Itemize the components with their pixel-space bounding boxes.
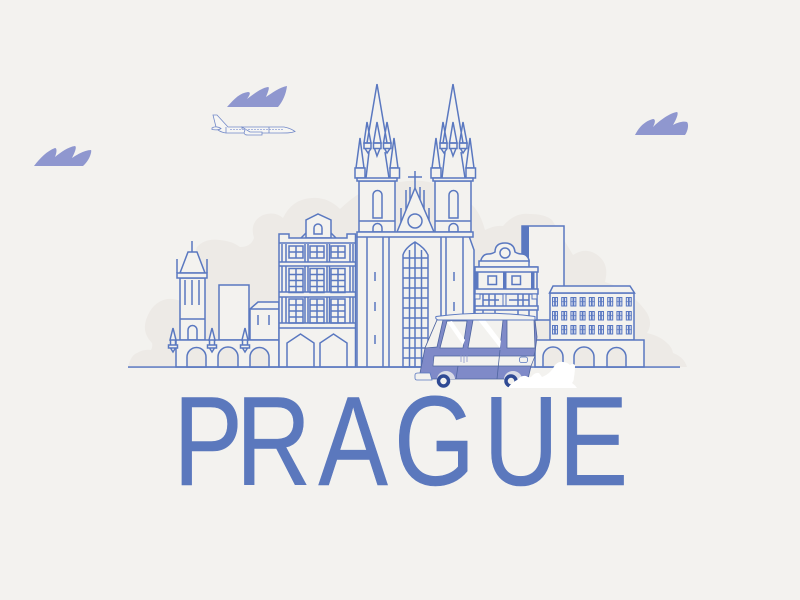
bus windows — [440, 320, 535, 348]
tall plain block — [522, 226, 564, 320]
airplane — [212, 115, 295, 135]
cloud: top centre — [227, 86, 287, 107]
bus lower stripe — [433, 356, 535, 366]
cloud: left — [34, 146, 91, 166]
old town bridge tower and bridge — [168, 241, 279, 367]
dome-topped house — [475, 243, 538, 320]
palace arcade — [535, 340, 644, 367]
house floor bands — [279, 262, 355, 328]
background cloud silhouette — [128, 181, 687, 367]
church of our lady before tyn — [355, 84, 476, 367]
bus headlight — [520, 357, 528, 362]
plain block building — [219, 285, 249, 340]
bridge statues — [168, 328, 250, 352]
ground line — [128, 366, 680, 368]
exhaust cloud — [508, 362, 577, 388]
bus door lines — [456, 350, 500, 379]
house ground arches — [287, 334, 347, 367]
palace upper floors — [550, 293, 634, 340]
arcaded palace — [535, 286, 644, 367]
renaissance house — [279, 214, 356, 367]
small gabled building — [250, 302, 279, 340]
church gothic window — [403, 242, 428, 367]
bus door handle — [461, 355, 467, 363]
bus bumper — [415, 373, 432, 380]
church right tower — [431, 84, 476, 232]
church left tower — [355, 84, 400, 232]
tram bus — [415, 313, 537, 386]
title: PRAGUE: PRAGUE — [173, 370, 628, 512]
house windows — [289, 246, 345, 323]
church nave and lower facade — [357, 236, 474, 367]
bus roof — [436, 313, 535, 320]
bus body — [420, 320, 537, 379]
bridge tower — [177, 241, 207, 340]
bus window glare — [447, 320, 501, 348]
bus front wheel — [506, 376, 516, 386]
bus wheel arches — [437, 371, 522, 379]
house gable — [306, 214, 331, 238]
palace windows — [552, 297, 632, 334]
church gable and cross — [357, 171, 473, 237]
bridge with arches — [176, 340, 279, 367]
cloud: right — [635, 112, 688, 135]
bus windshield edge — [425, 320, 443, 348]
bus rear wheel — [438, 376, 448, 386]
house body and cornice — [279, 234, 356, 367]
